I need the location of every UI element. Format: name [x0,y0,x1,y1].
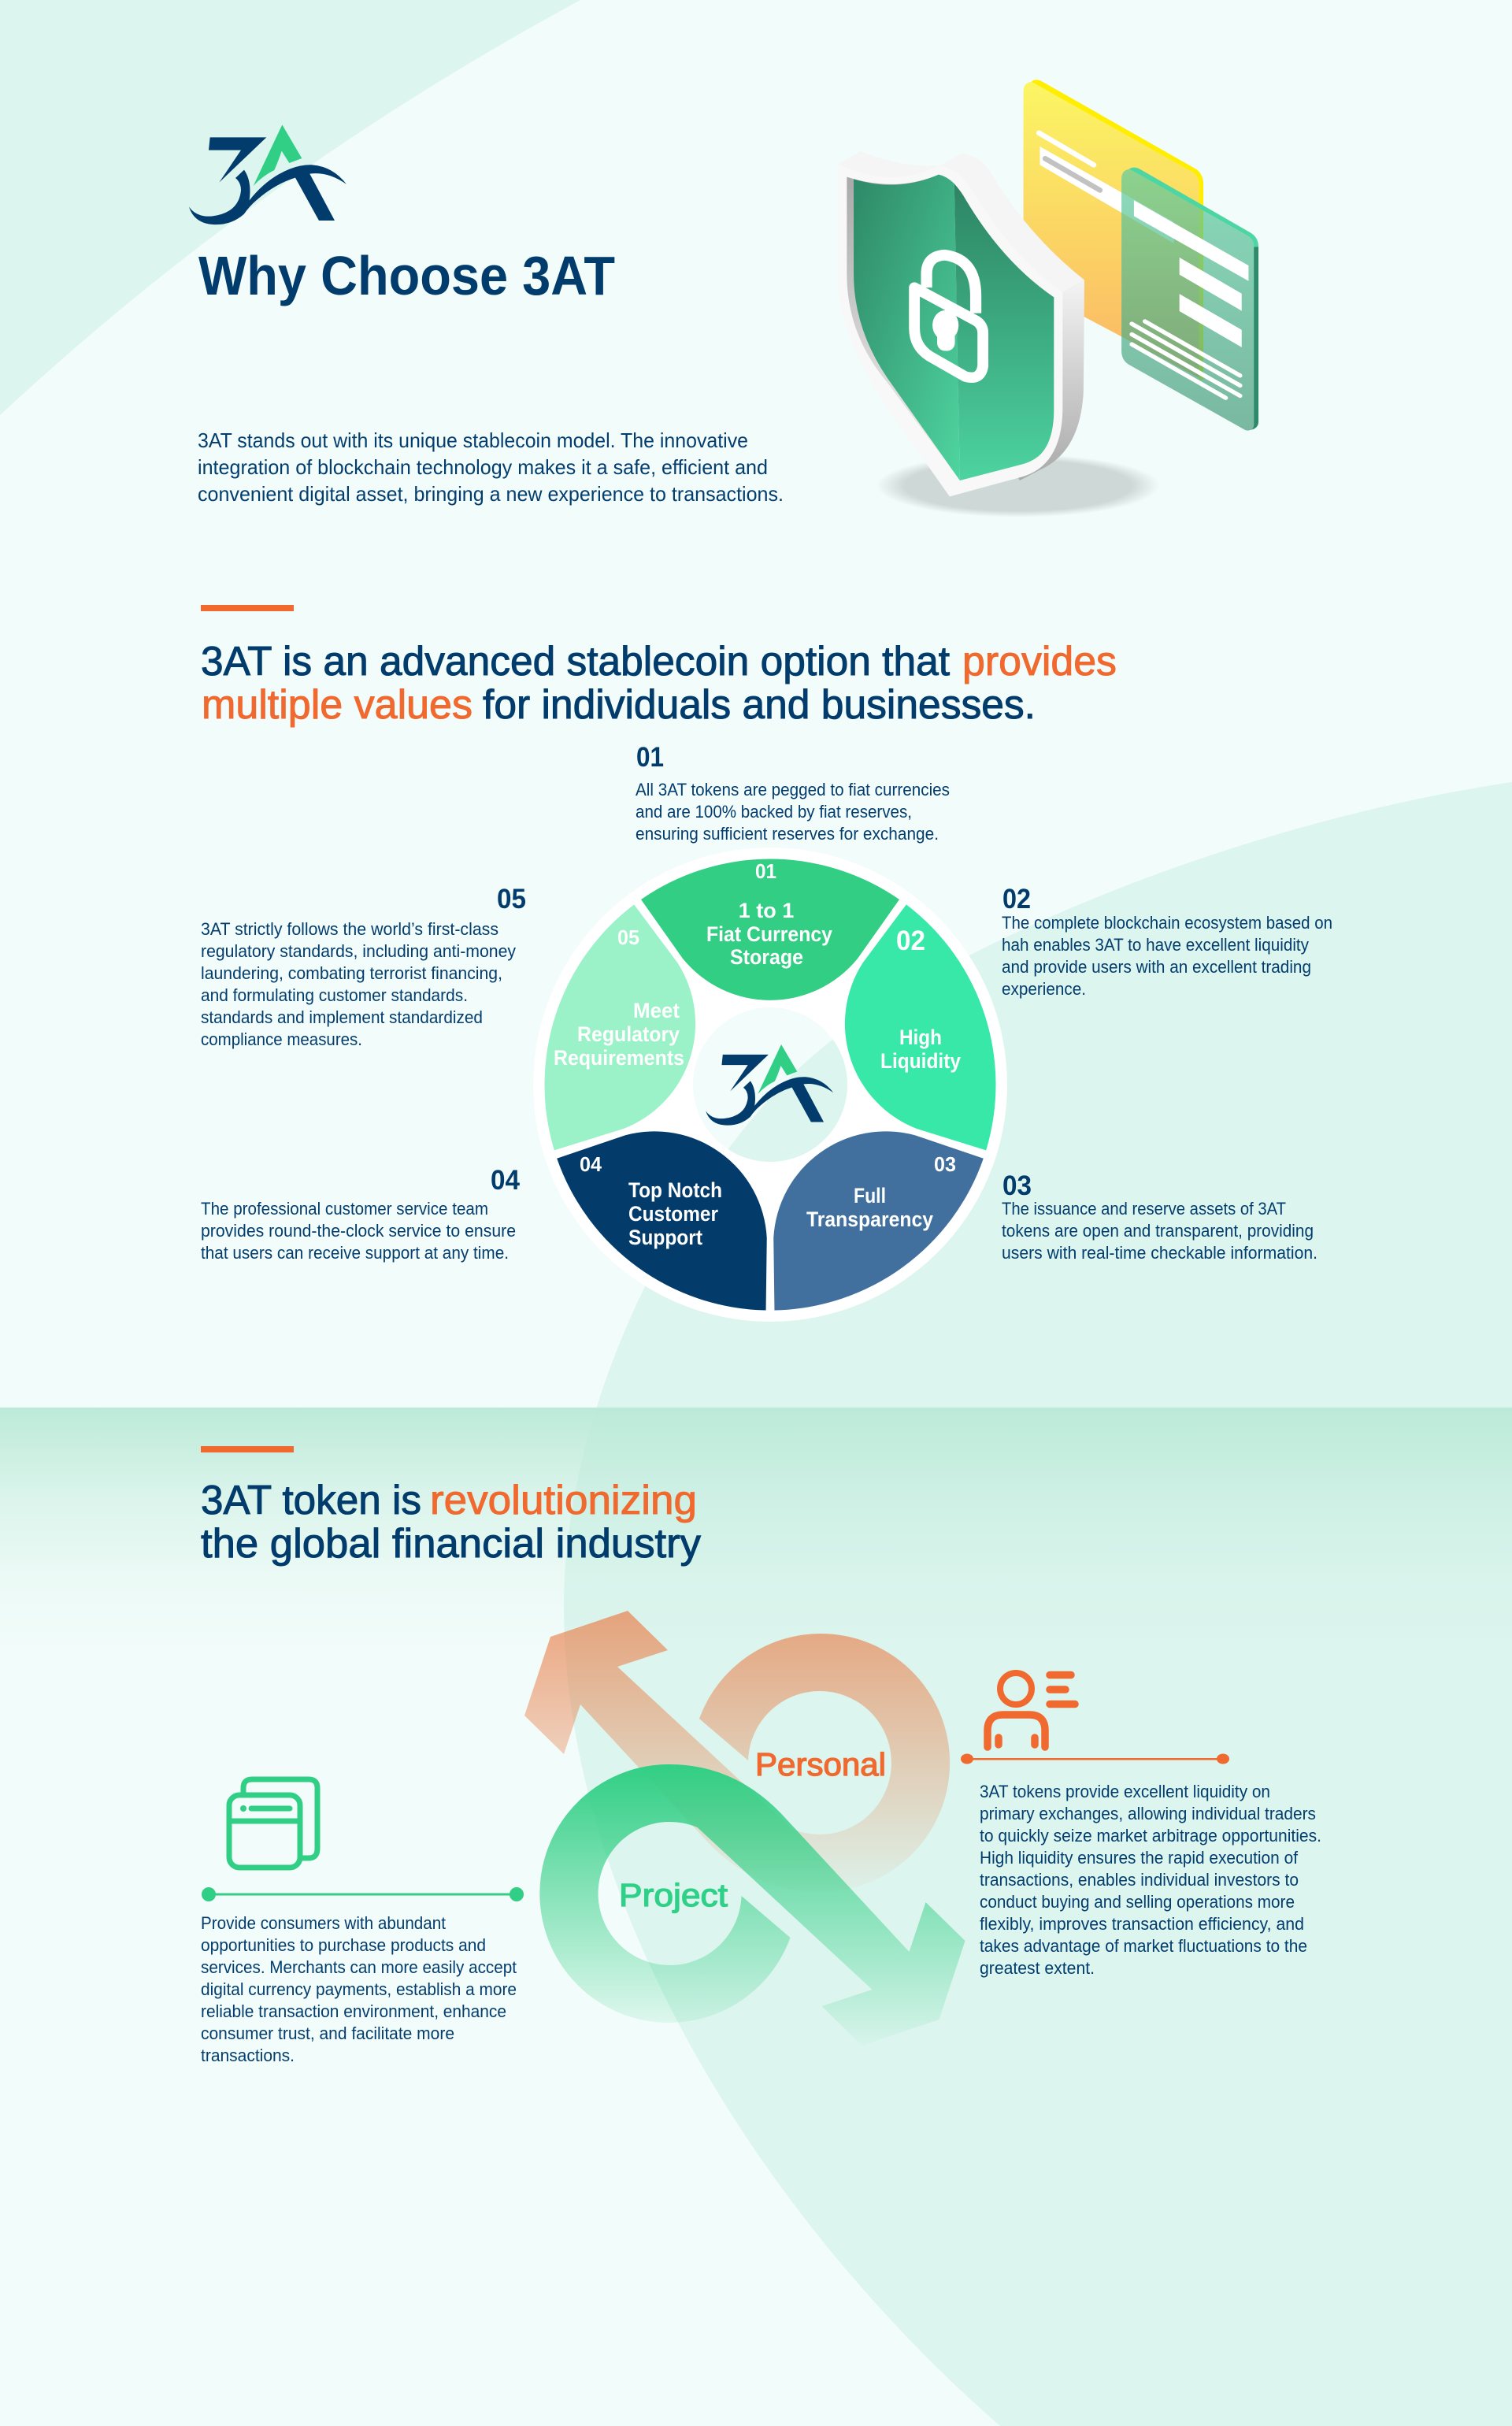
diagram: personal arrow [524,1611,950,1892]
text: project: reliable transaction environment, enhance [201,2001,506,2021]
heading: multiple values: multiple values [202,682,472,728]
text: project: Provide consumers with abundant [201,1913,446,1933]
text: 05: standards and implement standardized [201,1007,483,1027]
text: 04: that users can receive support at any time. [201,1243,509,1263]
text: 05: regulatory standards, including anti-money [201,941,516,961]
heading: multiple values [201,639,1117,728]
text: project: opportunities to purchase products and [201,1935,486,1955]
label: 02: Liquidity [880,1049,961,1073]
diagram: project arrow [539,1764,965,2046]
text: 03: tokens are open and transparent, providing [1002,1221,1314,1241]
text: 01: ensuring sufficient reserves for exchange. [636,824,939,844]
text: project [201,1913,517,2065]
label: 01: 01 [755,859,776,883]
label: 03: Full [854,1184,886,1207]
center logo [706,1044,833,1126]
wheel diagram [533,848,1007,1322]
label: 04 [580,1152,722,1249]
petal: 04 [533,1077,825,1343]
icon: project window [229,1779,317,1868]
heading: multiple values: for individuals and businesses. [483,682,1036,728]
label: personal: Personal [755,1746,886,1782]
text: 04: The professional customer service team [201,1199,488,1219]
text: 03: The issuance and reserve assets of 3AT [1002,1199,1286,1219]
text: 05: laundering, combating terrorist financing, [201,963,502,983]
label: 02: 02 [896,926,925,956]
label: 02: High [899,1026,942,1049]
intro text: 3AT stands out with its unique stablecoin model. The innovative [198,428,748,452]
petal: 02 [810,892,1025,1181]
text: 02: The complete blockchain ecosystem based on [1002,913,1332,933]
text: 01: All 3AT tokens are pegged to fiat currencies [636,780,950,799]
label: 04: Top Notch [628,1178,722,1202]
text: personal: conduct buying and selling operations more [980,1892,1295,1912]
text: 04: 04 [491,1165,521,1196]
text: project: digital currency payments, establish a more [201,1979,517,1999]
label: 05: Meet [633,999,680,1022]
text: personal: to quickly seize market arbitrage opportunities. [980,1826,1321,1845]
heading: revolutionizing: the global financial industry [201,1521,701,1567]
label: 04: Customer [628,1202,718,1226]
intro text: integration of blockchain technology makes it a safe, efficient and [198,455,768,479]
text: personal: greatest extent. [980,1958,1095,1978]
text: personal: High liquidity ensures the rapid execution of [980,1848,1299,1868]
icon: person [988,1673,1075,1747]
label: 05: Requirements [554,1046,684,1070]
text: personal: takes advantage of market fluctuations to the [980,1936,1307,1956]
text: personal: 3AT tokens provide excellent liquidity on [980,1782,1270,1801]
label: 02 [880,926,961,1073]
heading: revolutionizing: 3AT token is [201,1478,421,1523]
logo [189,124,346,224]
label: 04: 04 [580,1152,602,1176]
text: project: services. Merchants can more easily accept [201,1957,517,1977]
text: personal: flexibly, improves transaction efficiency, and [980,1914,1304,1934]
text: 04 [201,1165,521,1263]
text: 02 [1002,884,1332,999]
section bar [201,605,294,611]
label: project: Project [619,1877,728,1913]
text: 01: and are 100% backed by fiat reserves, [636,802,912,822]
illustration: shield and cards [839,80,1258,517]
text: project: consumer trust, and facilitate more [201,2024,454,2043]
text: 03: users with real-time checkable information. [1002,1243,1317,1263]
text: 03: 03 [1002,1170,1032,1201]
text: personal: transactions, enables individual investors to [980,1870,1299,1890]
petal: 01 [641,859,899,1000]
label: 03: 03 [934,1152,956,1176]
text: personal: primary exchanges, allowing individual traders [980,1804,1316,1823]
label: 03 [806,1152,956,1231]
heading: multiple values: 3AT is an advanced stablecoin option that [201,639,951,684]
heading: revolutionizing: revolutionizing [430,1478,697,1523]
label: 05: Regulatory [577,1022,680,1046]
text: 05 [201,884,526,1049]
text: 02: experience. [1002,979,1086,999]
label: 01: Fiat Currency [706,922,832,946]
text: 05: 05 [497,884,526,914]
label: 05 [554,926,684,1070]
text: 02: 02 [1002,884,1031,914]
center circle [693,1007,847,1162]
connector: project [202,1887,524,1901]
text: 05: compliance measures. [201,1029,362,1049]
text: 03 [1002,1170,1317,1263]
text: 05: 3AT strictly follows the world’s first-class [201,919,498,939]
text: 01: 01 [636,742,664,773]
heading: multiple values: provides [962,639,1117,684]
label: 03: Transparency [806,1207,933,1231]
intro text [198,428,784,506]
text: 01 [636,742,950,844]
intro text: convenient digital asset, bringing a new experience to transactions. [198,482,784,506]
label: 01 [706,859,832,969]
petal: 03 [715,1077,1007,1343]
connector: personal [961,1753,1229,1764]
label: 04: Support [628,1226,702,1249]
label: 05: 05 [617,926,639,949]
text: 05: and formulating customer standards. [201,985,468,1005]
heading: revolutionizing [201,1478,701,1567]
text: 04: provides round-the-clock service to ensure [201,1221,516,1241]
text: project: transactions. [201,2046,295,2065]
text: 02: and provide users with an excellent trading [1002,957,1311,977]
text: personal [980,1782,1321,1978]
title: Why Choose 3AT [198,245,615,306]
label: 01: 1 to 1 [739,899,794,922]
label: 01: Storage [730,945,803,969]
text: 02: hah enables 3AT to have excellent liquidity [1002,935,1309,955]
petal: 05 [516,892,730,1181]
section bar [201,1446,294,1452]
